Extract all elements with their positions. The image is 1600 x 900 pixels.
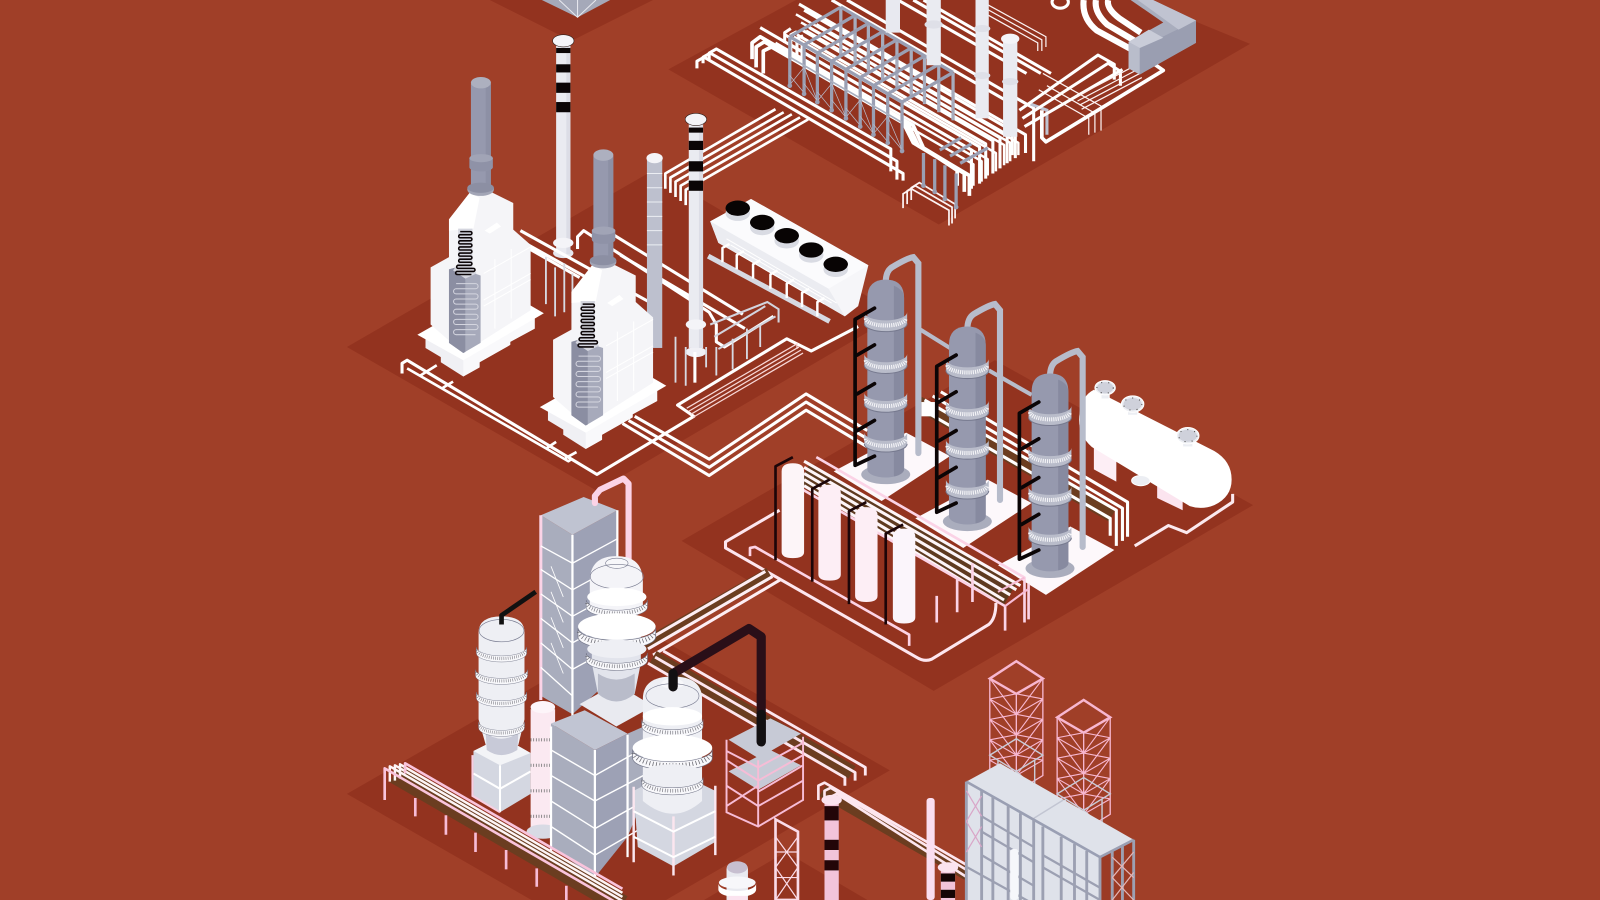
pipes and box at top right — [1019, 0, 1196, 142]
small pipe frame near stack 3 — [710, 302, 779, 349]
reactor vessel B — [578, 556, 656, 727]
vertical tanks — [776, 457, 915, 624]
top plant: pipe rack — [665, 0, 1101, 226]
lattice mast — [776, 819, 798, 900]
reactor vessel C with block — [633, 677, 715, 876]
tower frame back — [541, 479, 629, 724]
lower-left pipe rack — [385, 763, 622, 900]
distillation column 2 — [915, 304, 1032, 548]
loop pipes around tanks — [641, 510, 996, 660]
connector pipes between columns — [920, 330, 1032, 395]
lower-left pipes — [648, 651, 865, 786]
stacks of middle-left unit, rear — [517, 35, 779, 386]
bottom right: pipe with hook — [818, 783, 967, 878]
tower frame front — [551, 710, 653, 883]
steel rack frame — [787, 7, 988, 209]
pipes between furnaces and stacks — [517, 231, 653, 304]
small end bundle — [903, 183, 955, 226]
small striped stack — [821, 795, 842, 900]
thin bundle top right — [978, 3, 1046, 51]
scaffold tower 1 — [990, 661, 1043, 800]
top stacks — [886, 0, 1019, 137]
stack 1 — [553, 35, 574, 258]
furnace 1 — [417, 77, 544, 377]
air cooler — [708, 199, 868, 321]
furnace 2 — [540, 149, 666, 449]
table platform frame — [727, 718, 803, 827]
long diagonal pipe bundle — [697, 49, 903, 181]
white pole and small stack — [927, 798, 958, 900]
dark overhead pipes — [673, 629, 761, 742]
main pipes, middle-left unit — [402, 327, 867, 476]
platform shadows — [347, 0, 1253, 900]
crossing pipes to furnace unit — [665, 109, 808, 205]
distillation column 3 — [998, 351, 1114, 595]
stack 3 — [685, 113, 707, 383]
stack 2 gray ribbed — [646, 153, 663, 348]
tank rack — [796, 457, 1029, 631]
scaffold tower 2 — [1057, 700, 1110, 839]
main pipe run beneath rack — [760, 4, 1026, 189]
small vessel at bottom — [718, 861, 756, 900]
small unit cut off at top — [542, 0, 610, 17]
horizontal pressure vessel — [1079, 381, 1232, 510]
right unit: pipe bundle — [918, 392, 1233, 546]
cooling building — [966, 763, 1134, 900]
distillation column 1 — [834, 257, 950, 501]
thin column — [527, 701, 559, 839]
reactor vessel A with block — [472, 592, 536, 812]
